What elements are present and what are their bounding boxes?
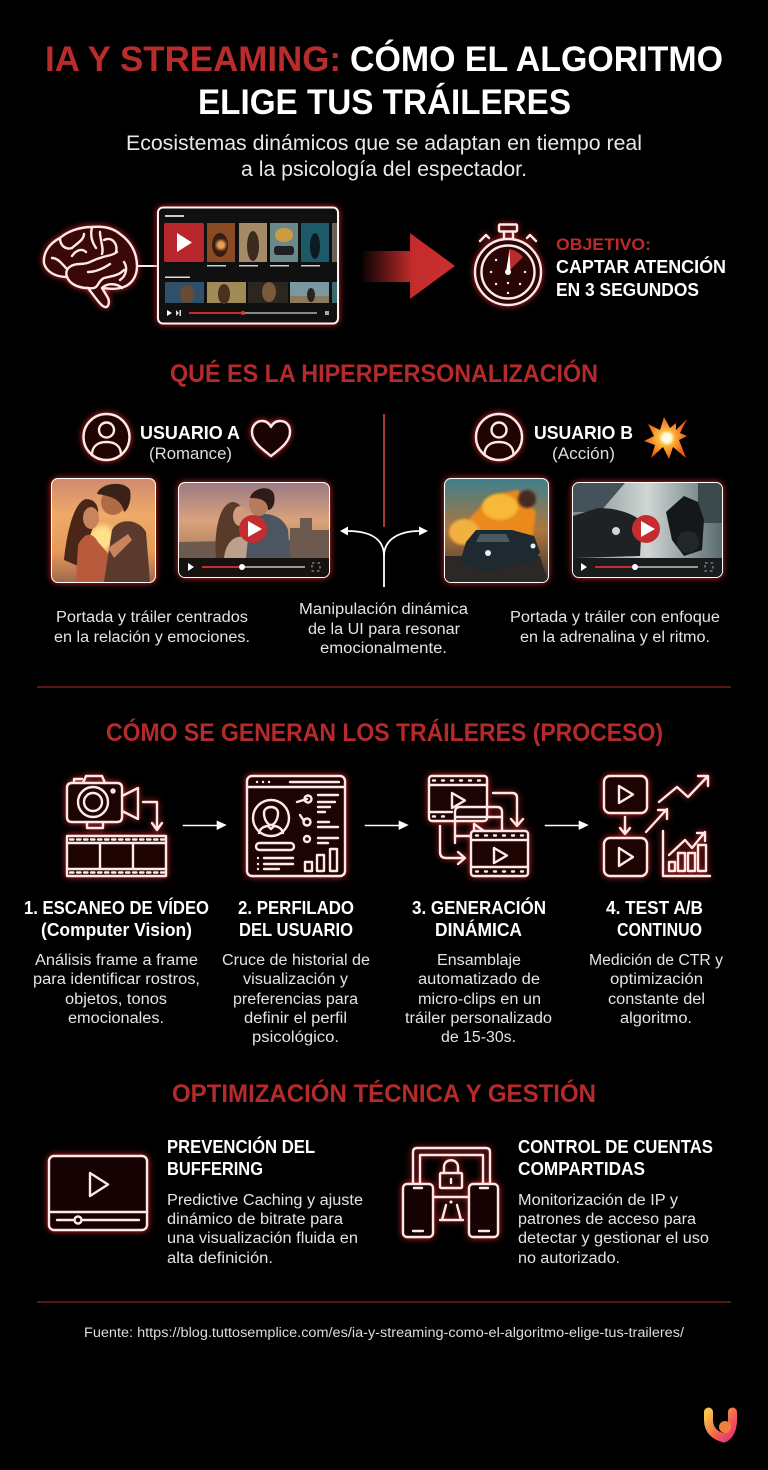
- divider: vertical: [383, 414, 385, 527]
- step 3: DINÁMICA: [435, 919, 522, 940]
- subtitle: Ecosistemas dinámicos que se adaptan en tiempo real: [126, 131, 642, 155]
- callout: objective: OBJETIVO:: [556, 235, 651, 254]
- subtitle: [126, 131, 642, 181]
- heading: hiperpersonalización: QUÉ ES LA HIPERPERSONALIZACIÓN: [170, 358, 598, 388]
- text: shared accounts: patrones de acceso para: [518, 1211, 696, 1228]
- icon: user profile: [247, 776, 345, 876]
- step 3: tráiler personalizado: [405, 1010, 552, 1027]
- callout: objective: [556, 235, 726, 300]
- caption: dynamic UI: emocionalmente.: [320, 640, 447, 657]
- step 4: Medición de CTR y: [589, 952, 723, 969]
- video player: romance trailer: [179, 483, 329, 577]
- caption: user A: en la relación y emociones.: [54, 629, 250, 646]
- icon: user A: [84, 414, 130, 460]
- icon: brain: [44, 227, 137, 307]
- step 1: [24, 897, 209, 1027]
- callout: objective: CAPTAR ATENCIÓN: [556, 256, 726, 277]
- icon: A/B test: [604, 776, 710, 876]
- step 2: visualización y: [243, 971, 348, 988]
- logo: [708, 1412, 732, 1438]
- icon: dynamic clips: [429, 776, 528, 876]
- step 1: 1. ESCANEO DE VÍDEO: [24, 897, 209, 918]
- image: action cover: [445, 479, 548, 582]
- caption: user B: en la adrenalina y el ritmo.: [520, 629, 710, 646]
- label: user B: (Acción): [552, 444, 615, 463]
- source: Fuente: https://blog.tuttosemplice.com/es/ia-y-streaming-como-el-algoritmo-elige-tus-traileres/: [84, 1325, 684, 1340]
- step 2: 2. PERFILADO: [238, 898, 354, 918]
- caption: user A: [54, 609, 250, 646]
- step 2: Cruce de historial de: [222, 952, 370, 969]
- step 2: definir el perfil: [244, 1010, 347, 1027]
- caption: user A: Portada y tráiler centrados: [56, 609, 248, 626]
- text: buffering: alta definición.: [167, 1250, 273, 1267]
- subtitle: a la psicología del espectador.: [241, 157, 527, 181]
- arrow: step 3 to 4: [545, 821, 588, 830]
- label: user A: USUARIO A: [140, 423, 240, 443]
- text: shared accounts: [518, 1137, 713, 1267]
- label: user A: (Romance): [149, 444, 232, 463]
- caption: dynamic UI: Manipulación dinámica: [299, 601, 468, 618]
- text: buffering: dinámico de bitrate para: [167, 1211, 343, 1228]
- step 3: de 15-30s.: [441, 1029, 516, 1046]
- icon: stopwatch: [475, 224, 541, 305]
- step 3: [405, 897, 552, 1046]
- step 1: Análisis frame a frame: [35, 952, 198, 969]
- title: IA Y STREAMING:: [45, 40, 341, 79]
- caption: user B: [510, 609, 720, 646]
- step 1: objetos, tonos: [65, 991, 167, 1008]
- step 2: [222, 898, 370, 1046]
- step 1: (Computer Vision): [41, 920, 192, 940]
- caption: user B: Portada y tráiler con enfoque: [510, 609, 720, 626]
- callout: objective: EN 3 SEGUNDOS: [556, 280, 699, 300]
- icon: heart: [252, 421, 290, 456]
- step 3: 3. GENERACIÓN: [412, 897, 546, 918]
- step 1: emocionales.: [68, 1010, 164, 1027]
- arrow: to objective: [362, 233, 455, 299]
- heading: optimización: OPTIMIZACIÓN TÉCNICA Y GESTIÓN: [172, 1078, 596, 1108]
- text: buffering: PREVENCIÓN DEL: [167, 1136, 315, 1157]
- title: [45, 39, 723, 122]
- caption: dynamic UI: de la UI para resonar: [308, 621, 460, 638]
- arrow: step 2 to 3: [365, 821, 408, 830]
- text: buffering: Predictive Caching y ajuste: [167, 1192, 363, 1209]
- icon: video player: [49, 1156, 147, 1230]
- label: user B: USUARIO B: [534, 423, 633, 443]
- arrow: step 1 to 2: [183, 821, 226, 830]
- caption: dynamic UI: [299, 601, 468, 657]
- title: CÓMO EL ALGORITMO: [350, 39, 723, 79]
- step 4: algoritmo.: [620, 1010, 692, 1027]
- icon: explosion: [644, 417, 687, 459]
- step 2: psicológico.: [252, 1029, 339, 1046]
- icon: user B: [476, 414, 522, 460]
- step 2: preferencias para: [233, 991, 358, 1008]
- text: buffering: una visualización fluida en: [167, 1230, 358, 1247]
- text: shared accounts: COMPARTIDAS: [518, 1159, 645, 1179]
- panel: streaming screen: [158, 208, 338, 324]
- video player: action trailer: [573, 483, 722, 577]
- connector: brain to screen: [137, 265, 158, 267]
- text: shared accounts: detectar y gestionar el uso: [518, 1230, 709, 1247]
- step 4: CONTINUO: [617, 920, 702, 940]
- step 1: para identificar rostros,: [33, 971, 200, 988]
- text: shared accounts: CONTROL DE CUENTAS: [518, 1137, 713, 1157]
- text: buffering: BUFFERING: [167, 1159, 263, 1179]
- step 3: Ensamblaje: [437, 952, 521, 969]
- label: user B: [534, 423, 633, 463]
- text: buffering: [167, 1136, 363, 1267]
- icon: devices with lock: [403, 1148, 498, 1237]
- arrow: split to both users: [340, 526, 428, 587]
- text: shared accounts: Monitorización de IP y: [518, 1192, 678, 1209]
- step 4: constante del: [608, 991, 705, 1008]
- label: user A: [140, 423, 240, 463]
- step 4: 4. TEST A/B: [606, 898, 703, 918]
- step 4: optimización: [610, 971, 703, 988]
- step 4: [589, 898, 723, 1027]
- step 3: micro-clips en un: [418, 991, 541, 1008]
- image: romance cover: [52, 479, 155, 582]
- step 3: automatizado de: [418, 971, 540, 988]
- text: shared accounts: no autorizado.: [518, 1250, 620, 1267]
- heading: proceso: CÓMO SE GENERAN LOS TRÁILERES (PROCESO): [106, 717, 663, 747]
- icon: camera and film: [67, 776, 166, 876]
- title: ELIGE TUS TRÁILERES: [198, 82, 571, 122]
- step 2: DEL USUARIO: [239, 920, 353, 940]
